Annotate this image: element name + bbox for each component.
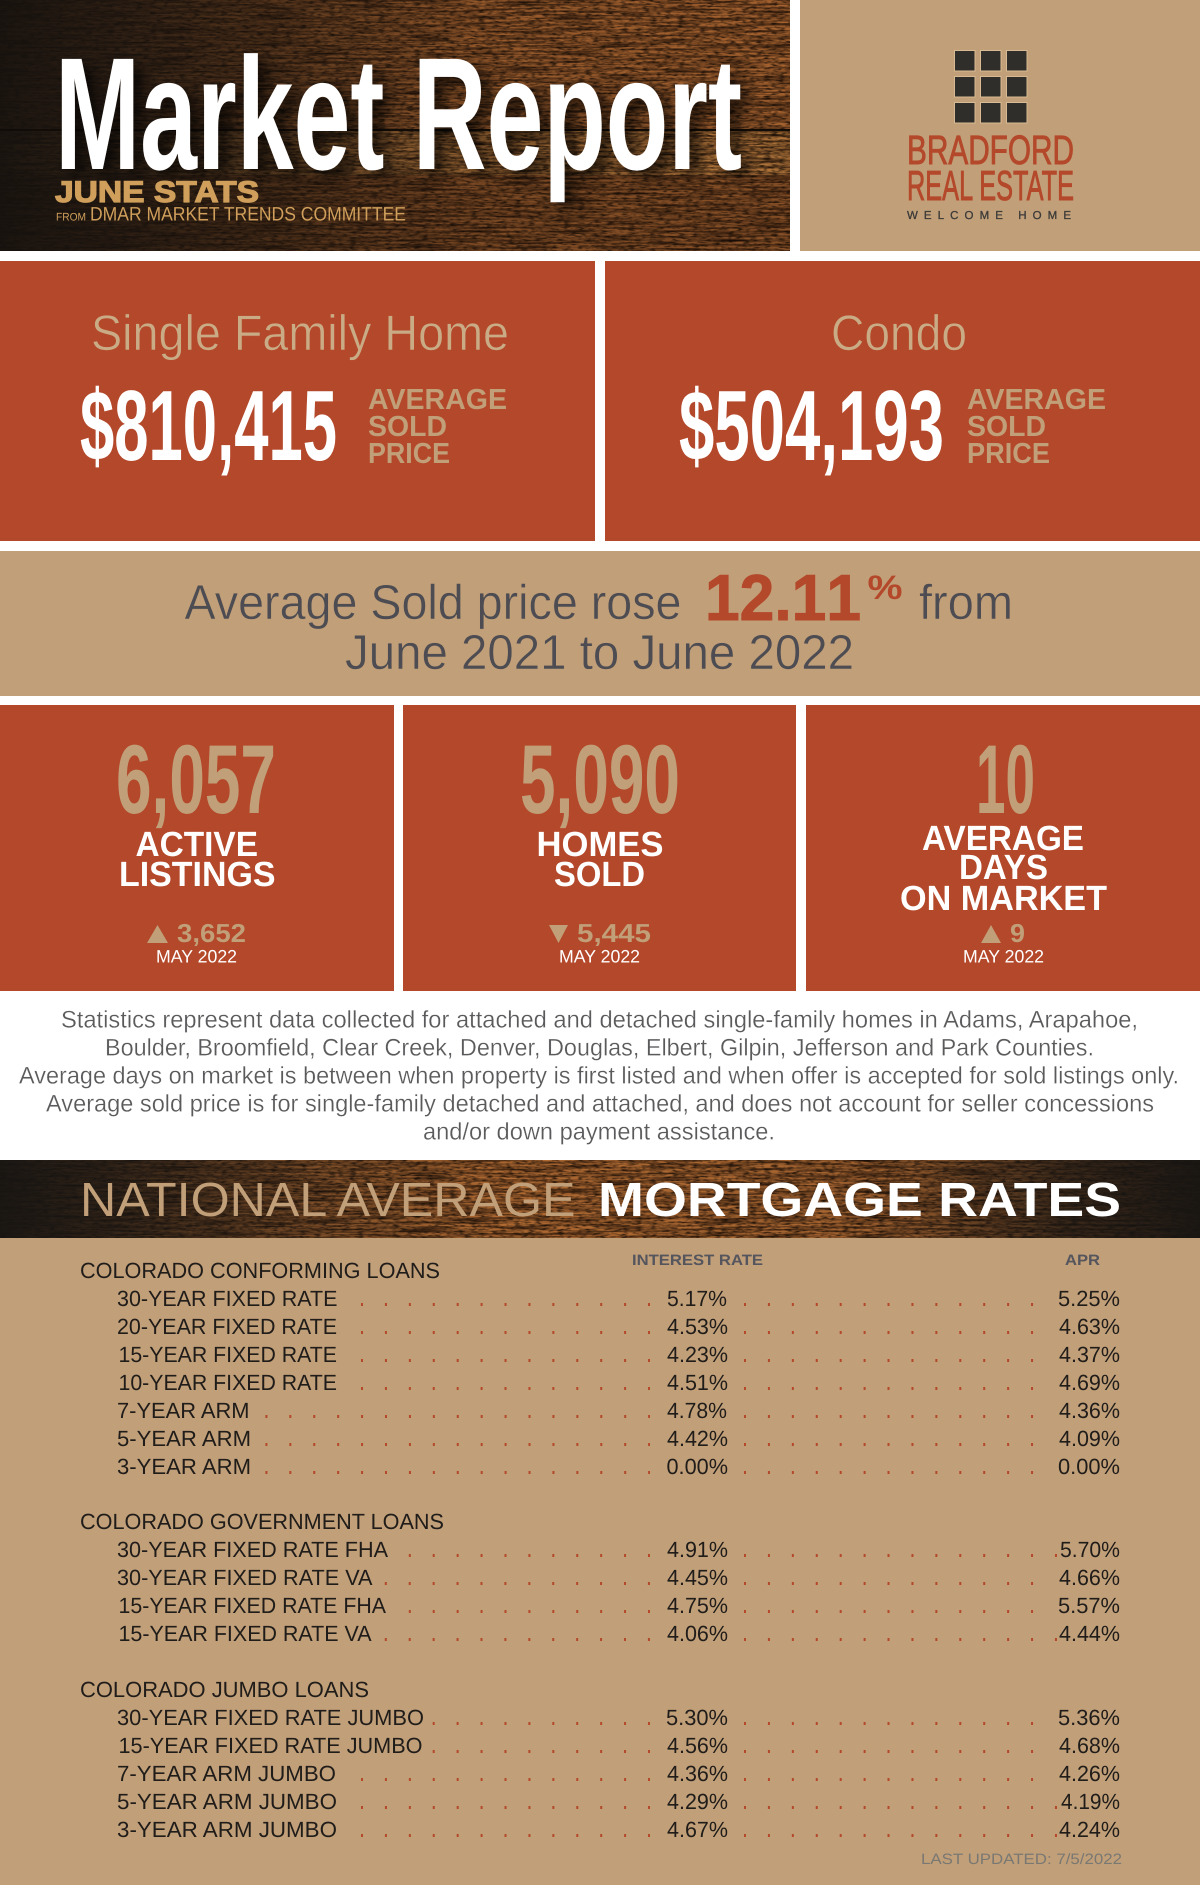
callout text: June 2021 to June 2022	[345, 626, 854, 680]
panel: logo	[800, 0, 1200, 251]
previous value: 3,652	[177, 918, 246, 948]
row: 15-year FHA: 5.57%	[1058, 1593, 1120, 1618]
price label	[368, 384, 507, 470]
price label: SOLD	[368, 411, 447, 443]
stat number: 6,057	[116, 724, 276, 834]
section: jumbo loans	[80, 1677, 1120, 1842]
section heading: COLORADO GOVERNMENT LOANS	[80, 1509, 444, 1534]
column headers: APR	[1065, 1252, 1100, 1269]
panel: single family home price	[0, 261, 595, 541]
row: 15-year fixed: 4.23%	[667, 1342, 728, 1367]
stat number: 5,090	[520, 724, 680, 834]
text block: statistics disclaimer: Boulder, Broomfield, Clear Creek, Denver, Douglas, Elbert, Gilpin, Jefferson and Park Counties.	[105, 1034, 1094, 1062]
heading: Single Family Home	[91, 305, 509, 361]
row: 7-year ARM	[117, 1398, 1120, 1423]
row: 30-year jumbo: 5.30%	[666, 1705, 728, 1730]
previous value: 5,445	[577, 918, 651, 948]
stat label	[900, 819, 1107, 918]
last updated note: LAST UPDATED: 7/5/2022	[921, 1851, 1122, 1868]
row: 3-year ARM: 3-YEAR ARM	[117, 1454, 251, 1479]
icon: down arrow	[549, 925, 568, 943]
heading: national average: NATIONAL AVERAGE	[80, 1174, 576, 1227]
row: 20-year fixed: 4.63%	[1059, 1314, 1120, 1339]
price label: AVERAGE	[368, 384, 507, 416]
row: 7-year ARM: 4.36%	[1059, 1398, 1120, 1423]
text block: statistics disclaimer	[19, 1006, 1179, 1146]
row: 3-year ARM jumbo: 3-YEAR ARM JUMBO	[117, 1817, 337, 1842]
row: 20-year fixed	[117, 1314, 1120, 1339]
row: 30-year jumbo	[117, 1705, 1120, 1730]
logo tagline: WELCOME HOME	[907, 210, 1071, 222]
row: 15-year jumbo: 4.56%	[667, 1733, 728, 1758]
row: 30-year VA	[117, 1565, 1120, 1590]
stat label	[536, 825, 664, 894]
row: 3-year ARM: 0.00%	[1058, 1454, 1120, 1479]
heading: mortgage rates: MORTGAGE RATES	[598, 1174, 1121, 1227]
panel: homes sold	[403, 705, 796, 991]
row: 15-year jumbo: 4.68%	[1059, 1733, 1120, 1758]
section: government loans	[80, 1509, 1120, 1646]
previous period: MAY 2022	[559, 946, 640, 966]
source line: DMAR MARKET TRENDS COMMITTEE	[90, 204, 406, 226]
row: 30-year fixed: 5.17%	[667, 1286, 727, 1311]
price: $504,193	[679, 370, 944, 482]
row: 30-year jumbo: 30-YEAR FIXED RATE JUMBO	[117, 1705, 424, 1730]
source line: FROM	[56, 212, 86, 224]
panel: condo price	[605, 261, 1200, 541]
row: 7-year ARM jumbo: 4.26%	[1059, 1761, 1120, 1786]
icon: window grid	[954, 50, 1027, 123]
callout text	[184, 576, 1013, 680]
wood texture background	[0, 1160, 1200, 1238]
panel: rates table	[0, 1238, 1200, 1885]
row: 3-year ARM jumbo: 4.67%	[667, 1817, 728, 1842]
row: 20-year fixed: 20-YEAR FIXED RATE	[117, 1314, 337, 1339]
row: 7-year ARM jumbo: 4.36%	[667, 1761, 728, 1786]
row: 20-year fixed: 4.53%	[667, 1314, 728, 1339]
row: 15-year VA	[118, 1621, 1120, 1646]
stat label: DAYS	[959, 848, 1048, 887]
row: 7-year ARM: 4.78%	[667, 1398, 727, 1423]
column headers	[632, 1252, 1100, 1269]
text block: statistics disclaimer: and/or down payment assistance.	[423, 1118, 775, 1146]
row: 30-year VA: 4.66%	[1059, 1565, 1120, 1590]
panel: header wood banner	[0, 0, 790, 251]
section heading: COLORADO JUMBO LOANS	[80, 1677, 369, 1702]
stat label: ON MARKET	[900, 879, 1107, 918]
row: 3-year ARM: 0.00%	[666, 1454, 728, 1479]
row: 5-year ARM	[117, 1426, 1120, 1451]
row: 5-year ARM: 4.09%	[1059, 1426, 1120, 1451]
callout text: from	[919, 576, 1013, 630]
row: 3-year ARM jumbo: 4.24%	[1059, 1817, 1120, 1842]
row: 15-year VA: 4.44%	[1059, 1621, 1120, 1646]
row: 30-year FHA: 30-YEAR FIXED RATE FHA	[117, 1537, 388, 1562]
stat label: HOMES	[536, 825, 664, 864]
row: 30-year VA: 4.45%	[667, 1565, 728, 1590]
row: 30-year jumbo: 5.36%	[1058, 1705, 1120, 1730]
row: 7-year ARM jumbo	[117, 1761, 1120, 1786]
row: 15-year VA: 15-YEAR FIXED RATE VA	[118, 1621, 372, 1646]
row: 10-year fixed: 4.51%	[667, 1370, 728, 1395]
price label	[967, 384, 1106, 470]
row: 5-year ARM: 5-YEAR ARM	[117, 1426, 251, 1451]
row: 15-year fixed	[118, 1342, 1120, 1367]
logo wordmark: BRADFORD	[907, 127, 1074, 173]
previous period: MAY 2022	[963, 946, 1044, 966]
row: 30-year FHA	[117, 1537, 1120, 1562]
stat label: LISTINGS	[119, 855, 276, 894]
row: 15-year FHA: 15-YEAR FIXED RATE FHA	[118, 1593, 386, 1618]
heading: Condo	[831, 305, 967, 361]
icon: up arrow	[147, 925, 168, 943]
price label: PRICE	[368, 438, 450, 470]
row: 15-year fixed: 4.37%	[1059, 1342, 1120, 1367]
price label: SOLD	[967, 411, 1046, 443]
row: 30-year FHA: 5.70%	[1060, 1537, 1120, 1562]
stat label: SOLD	[554, 855, 645, 894]
panel: active listings	[0, 705, 394, 991]
row: 5-year ARM jumbo	[117, 1789, 1120, 1814]
text block: statistics disclaimer: Average sold price is for single-family detached and attached, and does not account for seller concessions	[46, 1090, 1154, 1118]
row: 15-year jumbo	[118, 1733, 1120, 1758]
row: 15-year jumbo: 15-YEAR FIXED RATE JUMBO	[118, 1733, 422, 1758]
row: 5-year ARM jumbo: 5-YEAR ARM JUMBO	[117, 1789, 337, 1814]
section heading: COLORADO CONFORMING LOANS	[80, 1258, 440, 1283]
row: 30-year fixed	[117, 1286, 1120, 1311]
logo wordmark: REAL ESTATE	[907, 162, 1074, 209]
stat label: ACTIVE	[136, 825, 258, 864]
price label: AVERAGE	[967, 384, 1106, 416]
panel: price change callout	[0, 551, 1200, 696]
row: 15-year FHA	[118, 1593, 1120, 1618]
row: 10-year fixed	[118, 1370, 1120, 1395]
row: 10-year fixed: 4.69%	[1059, 1370, 1120, 1395]
row: 30-year FHA: 4.91%	[667, 1537, 728, 1562]
callout percentage: 12.11	[705, 561, 861, 634]
logo wordmark	[907, 127, 1074, 209]
row: 5-year ARM jumbo: 4.19%	[1061, 1789, 1120, 1814]
callout percentage: %	[868, 569, 902, 607]
row: 5-year ARM: 4.42%	[667, 1426, 728, 1451]
row: 30-year fixed: 5.25%	[1058, 1286, 1120, 1311]
subtitle: June stats: JUNE STATS	[55, 176, 259, 209]
row: 15-year VA: 4.06%	[667, 1621, 728, 1646]
text block: statistics disclaimer: Average days on market is between when property is first listed and when offer is accepted for sold listings only.	[19, 1062, 1179, 1090]
price label: PRICE	[967, 438, 1050, 470]
row: 15-year fixed: 15-YEAR FIXED RATE	[118, 1342, 337, 1367]
panel: average days on market	[806, 705, 1200, 991]
title: Market Report	[55, 24, 742, 203]
row: 7-year ARM: 7-YEAR ARM	[117, 1398, 250, 1423]
column headers: INTEREST RATE	[632, 1252, 763, 1269]
stat number: 10	[976, 724, 1035, 834]
row: 10-year fixed: 10-YEAR FIXED RATE	[118, 1370, 337, 1395]
panel: mortgage rates banner	[0, 1160, 1200, 1238]
row: 3-year ARM	[117, 1454, 1120, 1479]
stat label	[119, 825, 276, 894]
stat label: AVERAGE	[922, 819, 1084, 858]
callout text: Average Sold price rose	[184, 576, 682, 630]
section: conforming loans	[80, 1258, 1120, 1479]
wood texture background	[0, 0, 790, 251]
row: 5-year ARM jumbo: 4.29%	[667, 1789, 728, 1814]
row: 30-year VA: 30-YEAR FIXED RATE VA	[117, 1565, 373, 1590]
previous value: 9	[1010, 918, 1025, 948]
text block: statistics disclaimer: Statistics represent data collected for attached and detached single-family homes in Adams, Arapahoe,	[61, 1006, 1138, 1034]
icon: up arrow	[981, 925, 1001, 943]
previous period: MAY 2022	[156, 946, 237, 966]
row: 15-year FHA: 4.75%	[667, 1593, 728, 1618]
row: 3-year ARM jumbo	[117, 1817, 1120, 1842]
row: 30-year fixed: 30-YEAR FIXED RATE	[117, 1286, 338, 1311]
row: 7-year ARM jumbo: 7-YEAR ARM JUMBO	[117, 1761, 336, 1786]
price: $810,415	[80, 370, 337, 482]
